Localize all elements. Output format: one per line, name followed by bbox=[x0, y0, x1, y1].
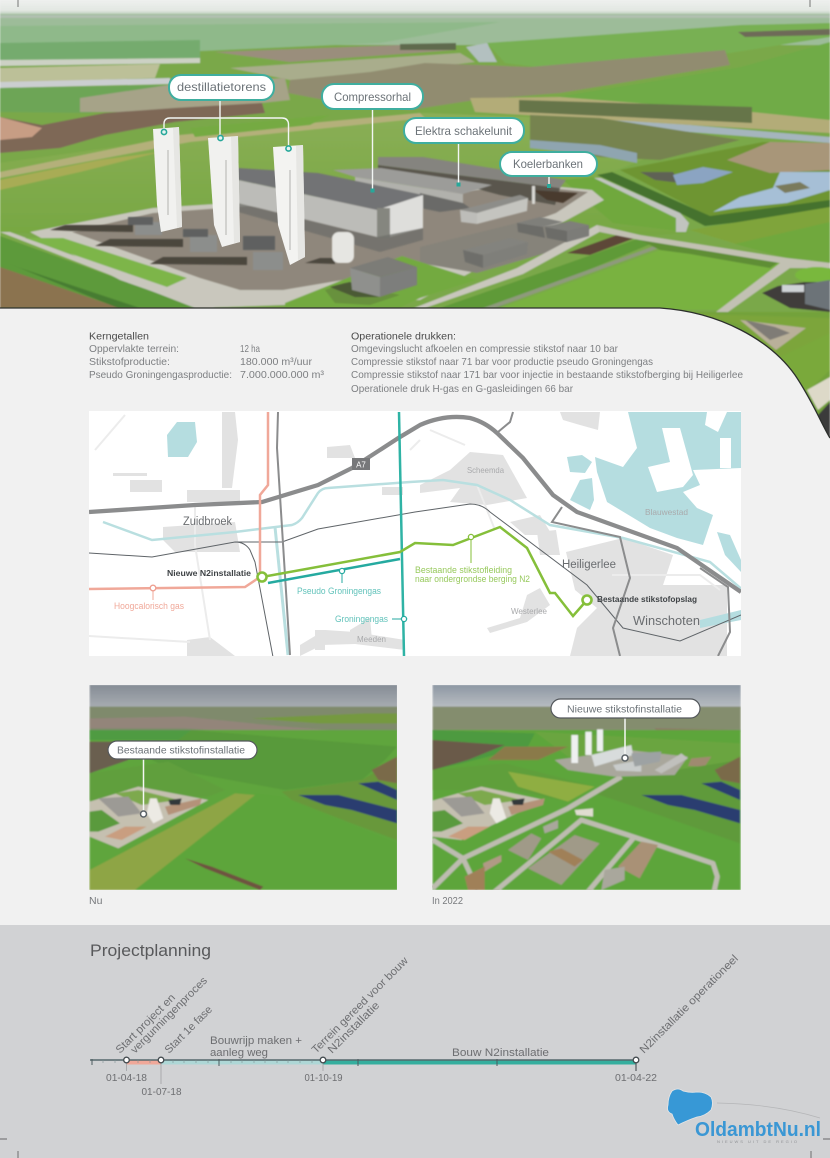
timeline milestone labels: N2installatie operationeel bbox=[638, 953, 741, 1056]
text block: Kerngetallen bbox=[89, 330, 325, 381]
map: motorway and secondary roads bbox=[89, 412, 741, 656]
callout: Koelerbanken: Koelerbanken bbox=[513, 157, 583, 171]
timeline phase labels: Bouwrijp maken + bbox=[210, 1035, 302, 1047]
timeline dates bbox=[106, 1072, 657, 1098]
map: place names: Meeden bbox=[357, 634, 386, 644]
equipment units bbox=[135, 222, 162, 235]
three distillation towers bbox=[153, 127, 305, 265]
map: place names: Zuidbroek bbox=[183, 516, 232, 528]
map: gas pipelines between Zuidbroek and Winschoten bbox=[89, 411, 745, 657]
map: place names bbox=[183, 465, 700, 644]
map: label Groningengas bbox=[335, 616, 408, 624]
logo: OldambtNu.nl: NIEUWS UIT DE REGIO bbox=[717, 1139, 797, 1144]
text block: Kerngetallen: Stikstofproductie: bbox=[89, 356, 170, 368]
middle field bbox=[0, 113, 690, 253]
soil heaps bbox=[0, 103, 265, 153]
panel: text and map background with curved edge bbox=[0, 308, 830, 925]
map: label existing pipeline: naar ondergrondse berging N2 bbox=[415, 574, 530, 584]
callout: destillatietorens: destillatietorens bbox=[177, 80, 266, 94]
map: node Nieuwe N2installatie bbox=[167, 568, 266, 582]
canal and tree belt bbox=[470, 97, 830, 133]
map: node Bestaande stikstofopslag: Bestaande stikstofopslag bbox=[597, 594, 697, 604]
callout: Bestaande stikstofinstallatie bbox=[108, 741, 257, 817]
text block: Operationele drukken: Operationele drukken: bbox=[351, 330, 456, 342]
timeline dates: 01-07-18 bbox=[142, 1086, 182, 1098]
map: Groningengas line bbox=[399, 412, 404, 656]
text block: Kerngetallen: Oppervlakte terrein: bbox=[89, 343, 179, 355]
map: place names: Scheemda bbox=[467, 465, 504, 475]
brown field and strips lower left bbox=[0, 236, 200, 308]
text block: Kerngetallen: 180.000 m³/uur bbox=[240, 356, 312, 368]
callout: Bestaande stikstofinstallatie: Bestaande stikstofinstallatie bbox=[117, 744, 245, 756]
text block: Operationele drukken: Operationele druk H-gas en G-gasleidingen 66 bar bbox=[351, 383, 573, 395]
timeline phase labels bbox=[210, 1035, 549, 1059]
timeline dates: 01-04-22 bbox=[615, 1072, 657, 1084]
substation equipment right bbox=[762, 282, 830, 312]
timeline milestones bbox=[124, 1057, 639, 1063]
map base: water bbox=[167, 412, 741, 628]
aerial photo: planned plant in landscape bbox=[0, 0, 830, 445]
text block: Operationele drukken: Omgevingslucht afkoelen en compressie stikstof naar 10 bar bbox=[351, 343, 618, 355]
timeline milestone labels: Start project en bbox=[114, 992, 178, 1056]
map: Hoogcalorisch gas line bbox=[89, 412, 268, 589]
site ground bbox=[30, 184, 604, 308]
timeline bars bbox=[90, 1059, 636, 1084]
timeline phase labels: aanleg weg bbox=[210, 1047, 268, 1059]
callout: Nieuwe stikstofinstallatie bbox=[551, 699, 700, 761]
plant buildings bbox=[50, 157, 589, 297]
text block: Kerngetallen: Pseudo Groningengasproductie: bbox=[89, 369, 232, 381]
curved panel edge bbox=[0, 308, 830, 438]
map: Pseudo Groningengas line bbox=[268, 559, 400, 583]
map: railway bbox=[89, 504, 741, 657]
lower right fields and roads bbox=[414, 225, 603, 308]
photo panel: Nu bbox=[89, 685, 398, 907]
timeline phase labels: Bouw N2installatie bbox=[452, 1047, 549, 1059]
timeline milestone labels: Start 1e fase bbox=[163, 1004, 215, 1056]
callout: Koelerbanken bbox=[500, 152, 597, 188]
map: place names: Heiligerlee bbox=[562, 559, 616, 571]
timeline dates: 01-04-18 bbox=[106, 1072, 147, 1084]
timeline milestone labels: vergunningenproces bbox=[129, 974, 210, 1056]
far landscape bbox=[0, 0, 830, 15]
map base: roads bbox=[89, 415, 720, 642]
text block: Kerngetallen: 12 ha bbox=[240, 343, 260, 355]
photo panel: In 2022 bbox=[432, 685, 741, 907]
map: label Pseudo Groningengas: Pseudo Groningengas bbox=[297, 586, 381, 596]
map: existing nitrogen pipeline bbox=[262, 527, 587, 616]
text block: Operationele drukken bbox=[351, 330, 743, 395]
map: A7 road sign bbox=[352, 458, 370, 470]
map: A7 road sign: A7 bbox=[356, 460, 366, 470]
map: label Hoogcalorisch gas bbox=[114, 585, 184, 611]
logo: OldambtNu.nl bbox=[668, 1089, 821, 1144]
map: label Hoogcalorisch gas: Hoogcalorisch gas bbox=[114, 601, 184, 611]
text block: Operationele drukken: Compressie stikstof naar 71 bar voor productie pseudo Groningengas bbox=[351, 356, 653, 368]
nature area with ponds bbox=[620, 142, 830, 217]
panel: project planning bbox=[0, 925, 830, 1158]
map: place names: Westerlee bbox=[511, 606, 547, 616]
callout: Elektra schakelunit: Elektra schakelunit bbox=[415, 124, 513, 138]
heading: Projectplanning: Projectplanning bbox=[90, 941, 211, 960]
photo: situation in 2022 bbox=[433, 685, 741, 892]
right far fields bbox=[487, 23, 830, 70]
timeline milestone labels: N2installatie bbox=[326, 1000, 382, 1056]
caption: Nu: Nu bbox=[89, 895, 103, 907]
caption: In 2022: In 2022 bbox=[432, 895, 463, 907]
lower right field under the curve bbox=[690, 312, 830, 445]
callout: Nieuwe stikstofinstallatie: Nieuwe stikstofinstallatie bbox=[567, 704, 682, 716]
photo: current situation bbox=[90, 685, 398, 890]
timeline milestone labels bbox=[114, 953, 741, 1056]
small buildings bbox=[517, 217, 563, 227]
callout: Compressorhal bbox=[322, 84, 423, 192]
map: label Groningengas: Groningengas bbox=[335, 614, 388, 624]
text block: Kerngetallen: 7.000.000.000 m³ bbox=[240, 369, 325, 381]
callout: Compressorhal: Compressorhal bbox=[334, 90, 411, 104]
text block: Operationele drukken: Compressie stikstof naar 171 bar voor injectie in bestaande stikstofberging bij Heiligerlee bbox=[351, 369, 743, 381]
map base: built-up areas bbox=[113, 412, 727, 656]
callout: destillatietorens bbox=[161, 75, 291, 151]
map: place names: Winschoten bbox=[633, 613, 700, 628]
map: place names: Blauwestad bbox=[645, 507, 688, 517]
timeline dates: 01-10-19 bbox=[304, 1072, 343, 1084]
map: label existing pipeline bbox=[415, 534, 530, 584]
shadows on the plate bbox=[50, 225, 133, 232]
callout: Elektra schakelunit bbox=[404, 118, 524, 186]
map: canal bbox=[103, 480, 745, 655]
map: node Nieuwe N2installatie: Nieuwe N2installatie bbox=[167, 568, 251, 578]
map: label Pseudo Groningengas bbox=[297, 568, 381, 596]
timeline milestone labels: Terrein gereed voor bouw bbox=[310, 955, 411, 1056]
logo: OldambtNu.nl: OldambtNu.nl bbox=[695, 1119, 821, 1141]
text block: Kerngetallen: Kerngetallen bbox=[89, 330, 149, 342]
map: label existing pipeline: Bestaande stikstofleiding bbox=[415, 565, 512, 575]
